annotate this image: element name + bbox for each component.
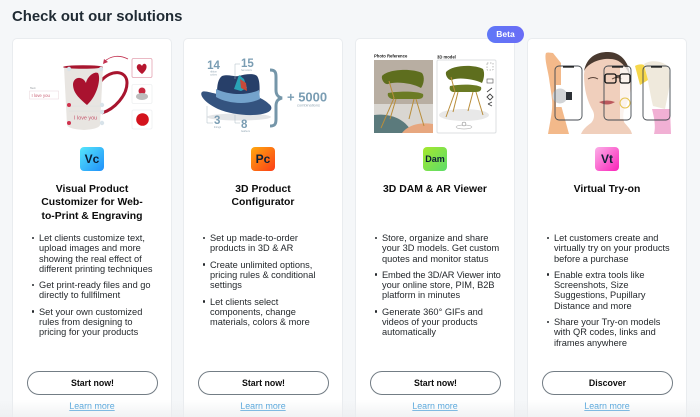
title: Check out our solutions bbox=[12, 9, 182, 25]
illustration: chair photo vs 3D model: Photo Reference bbox=[374, 54, 408, 58]
feature list: rules from designing to bbox=[39, 317, 133, 327]
illustration: chair photo vs 3D model: 3D model bbox=[437, 54, 456, 60]
button bbox=[542, 371, 673, 395]
feature list: with QR codes, links and bbox=[554, 327, 656, 337]
feature list: Screenshots, Size bbox=[554, 280, 629, 290]
heading: to-Print & Engraving bbox=[41, 211, 143, 222]
heading: 3D Product bbox=[235, 184, 291, 195]
feature list: your online store, PIM, B2B bbox=[382, 280, 495, 290]
heading bbox=[41, 184, 143, 222]
feature list bbox=[547, 233, 670, 348]
icon: Pc badge: Pc bbox=[256, 152, 270, 166]
feature list: your 3D models. Get custom bbox=[382, 243, 499, 253]
feature list: platform in minutes bbox=[382, 290, 460, 300]
feature list: Create unlimited options, bbox=[210, 260, 312, 270]
feature list: iframes anywhere bbox=[554, 338, 627, 348]
icon: Vt badge bbox=[595, 147, 619, 171]
panel: visual product customizer bbox=[12, 38, 172, 417]
feature list: Let clients select bbox=[210, 297, 278, 307]
icon: Vc badge: Vc bbox=[85, 152, 99, 166]
feature list: different printing techniques bbox=[39, 264, 152, 274]
feature list: Suggestions, Pupillary bbox=[554, 290, 646, 300]
icon: Vc badge bbox=[80, 147, 104, 171]
panel: 3D DAM and AR viewer bbox=[355, 38, 515, 417]
button: Discover bbox=[589, 378, 626, 388]
icon: Dam badge bbox=[423, 147, 447, 171]
feature list: videos of your products bbox=[382, 317, 478, 327]
button: Start now! bbox=[414, 378, 457, 388]
illustration: customised mug: I love you bbox=[74, 116, 97, 122]
feature list: Enable extra tools like bbox=[554, 270, 644, 280]
beta tag bbox=[487, 26, 524, 43]
feature list: materials, colors & more bbox=[210, 317, 310, 327]
feature list: Let clients customize text, bbox=[39, 233, 145, 243]
feature list: virtually try on your products bbox=[554, 243, 670, 253]
feature list bbox=[375, 233, 501, 337]
feature list: Store, organize and share bbox=[382, 233, 488, 243]
illustration: hat with combinations: 15 bbox=[241, 58, 254, 70]
button bbox=[370, 371, 501, 395]
panel: virtual try-on bbox=[527, 38, 687, 417]
link: Learn more bbox=[584, 401, 630, 411]
feature list: products in 3D & AR bbox=[210, 243, 293, 253]
feature list: showing the real effect of bbox=[39, 254, 142, 264]
illustration: hat with combinations: hat colors bbox=[241, 69, 253, 72]
illustration: customised mug bbox=[29, 56, 152, 130]
heading: Virtual Try-on bbox=[574, 184, 640, 195]
icon: Dam badge: Dam bbox=[425, 154, 445, 164]
feature list: Embed the 3D/AR Viewer into bbox=[382, 270, 501, 280]
icon: Pc badge bbox=[251, 147, 275, 171]
feature list: pricing rules & conditional bbox=[210, 270, 315, 280]
feature list bbox=[203, 233, 315, 327]
feature list: Set your own customized bbox=[39, 307, 142, 317]
feature list: automatically bbox=[382, 327, 436, 337]
illustration: hat with combinations: 3 bbox=[214, 115, 220, 127]
feature list: Let customers create and bbox=[554, 233, 658, 243]
button: Start now! bbox=[242, 378, 285, 388]
link: Learn more bbox=[240, 401, 286, 411]
illustration: customised mug: I love you bbox=[32, 93, 51, 98]
feature list: Set up made-to-order bbox=[210, 233, 298, 243]
link: Learn more bbox=[69, 401, 115, 411]
illustration: try-on phones bbox=[545, 52, 671, 134]
feature list: Generate 360° GIFs and bbox=[382, 307, 483, 317]
feature list: Distance and more bbox=[554, 301, 632, 311]
button bbox=[27, 371, 158, 395]
icon: Vt badge: Vt bbox=[601, 152, 613, 166]
feature list: Share your Try-on models bbox=[554, 317, 660, 327]
heading bbox=[232, 184, 294, 208]
beta tag: Beta bbox=[496, 29, 515, 39]
feature list: Get print-ready files and go bbox=[39, 280, 151, 290]
heading: Configurator bbox=[232, 197, 294, 208]
illustration: chair photo vs 3D model bbox=[374, 54, 496, 134]
illustration: hat with combinations: ribbon bbox=[210, 70, 218, 74]
illustration: hat with combinations: + 5000 bbox=[287, 90, 327, 104]
heading: Customizer for Web- bbox=[41, 197, 143, 208]
feature list: components, change bbox=[210, 307, 296, 317]
feature list: quotes and monitor status bbox=[382, 254, 488, 264]
feature list: settings bbox=[210, 280, 242, 290]
illustration: hat with combinations: 14 bbox=[207, 60, 220, 72]
heading: 3D DAM & AR Viewer bbox=[383, 184, 487, 195]
feature list bbox=[32, 233, 152, 337]
heading: Visual Product bbox=[56, 184, 128, 195]
button: Start now! bbox=[71, 378, 114, 388]
feature list: pricing for your products bbox=[39, 327, 138, 337]
illustration: customised mug: Text bbox=[30, 86, 36, 90]
panel: 3D product configurator bbox=[183, 38, 343, 417]
button bbox=[198, 371, 329, 395]
illustration: hat with combinations: feathers bbox=[241, 130, 251, 133]
feature list: directly to fullfilment bbox=[39, 290, 120, 300]
link: Learn more bbox=[412, 401, 458, 411]
illustration: hat with combinations: 8 bbox=[241, 119, 248, 131]
illustration: hat with combinations bbox=[201, 58, 327, 133]
illustration: hat with combinations: combinations bbox=[297, 102, 320, 108]
feature list: before a purchase bbox=[554, 254, 629, 264]
feature list: upload images and more bbox=[39, 243, 141, 253]
illustration: hat with combinations: linings bbox=[214, 126, 222, 129]
illustration: hat with combinations: colors bbox=[210, 74, 218, 76]
